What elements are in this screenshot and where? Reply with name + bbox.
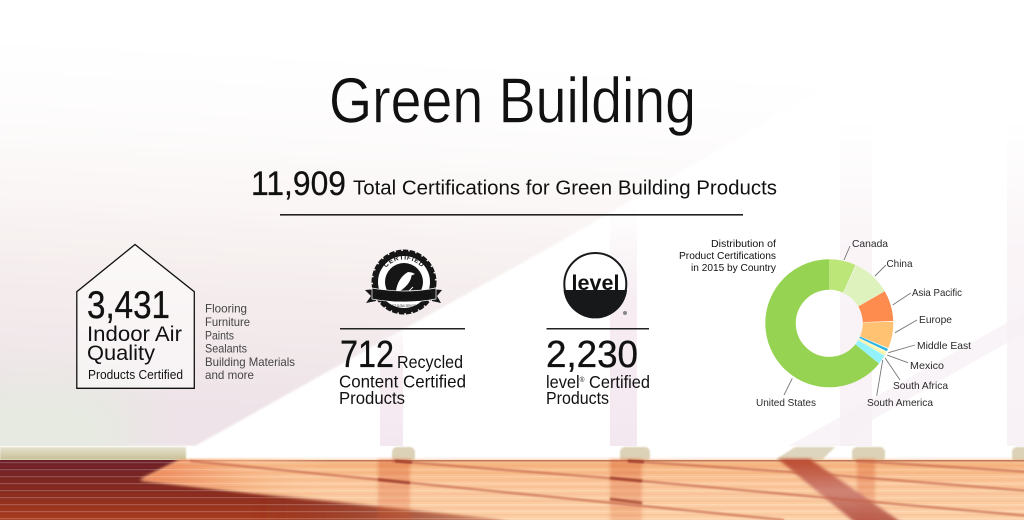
slice labels: China bbox=[886, 258, 913, 270]
stat: 2,230: 2,230 bbox=[546, 334, 638, 376]
label: recycled content certified products: Recycled bbox=[397, 352, 463, 372]
label: level certified products: Products bbox=[546, 388, 609, 408]
donut chart bbox=[761, 255, 898, 392]
subtitle: total certifications bbox=[251, 165, 777, 203]
divider bbox=[340, 328, 465, 330]
label: level certified products: Certified bbox=[585, 372, 650, 392]
chart heading bbox=[679, 238, 777, 274]
label: level certified products: ® bbox=[580, 376, 585, 384]
label: recycled content certified products: Content Certified bbox=[339, 372, 466, 392]
icon: level logo bbox=[564, 253, 627, 318]
icon: recycled content certified badge bbox=[365, 250, 442, 314]
label: level certified products bbox=[546, 372, 650, 408]
icon: level logo: level bbox=[572, 272, 620, 295]
list of product types: Flooring bbox=[205, 302, 247, 316]
slice labels bbox=[756, 238, 971, 409]
slice labels: South America bbox=[867, 397, 933, 409]
label: indoor air quality: Indoor Air bbox=[87, 323, 182, 346]
list of product types: Paints bbox=[205, 328, 234, 342]
leader lines bbox=[784, 246, 917, 396]
background scene: sunlit wall and wood floor bbox=[0, 168, 1024, 520]
icon: recycled content certified badge: SCS GLOBAL SERVICES bbox=[392, 304, 416, 308]
slice labels: Mexico bbox=[910, 360, 944, 372]
chart heading: in 2015 by Country bbox=[691, 262, 777, 274]
stat: 3,431: 3,431 bbox=[87, 284, 170, 327]
slice labels: Middle East bbox=[917, 340, 971, 352]
icon: recycled content certified badge: RECYCLED CONTENT bbox=[376, 292, 432, 300]
divider bbox=[546, 328, 649, 330]
chart heading: Distribution of bbox=[711, 238, 776, 250]
label: indoor air quality bbox=[87, 323, 182, 365]
list of product types: Furniture bbox=[205, 315, 250, 329]
slice labels: Canada bbox=[852, 238, 888, 250]
subtitle: total certifications: Total Certifications for Green Building Products bbox=[353, 176, 777, 200]
panel: recycled content bbox=[339, 250, 466, 408]
icon: recycled content certified badge: CERTIFIED bbox=[384, 256, 424, 267]
label: recycled content certified products bbox=[339, 352, 466, 408]
list of product types: Sealants bbox=[205, 342, 247, 356]
icon: house outline bbox=[77, 244, 194, 388]
panel: distribution donut chart bbox=[679, 238, 971, 409]
list of product types bbox=[205, 302, 295, 382]
stat: 712: 712 bbox=[340, 334, 394, 376]
label: level certified products: level bbox=[546, 372, 582, 392]
panel: level certified bbox=[546, 253, 650, 408]
label: products certified: Products Certified bbox=[88, 367, 183, 382]
chart heading: Product Certifications bbox=[679, 250, 776, 262]
slice labels: United States bbox=[756, 397, 816, 409]
list of product types: and more bbox=[205, 368, 254, 382]
divider under subtitle bbox=[280, 214, 743, 216]
slice labels: Asia Pacific bbox=[912, 287, 962, 299]
slice labels: Europe bbox=[919, 314, 952, 326]
list of product types: Building Materials bbox=[205, 355, 295, 369]
title: Green Building bbox=[329, 64, 696, 136]
label: indoor air quality: Quality bbox=[87, 342, 156, 365]
panel: indoor air quality bbox=[77, 244, 295, 388]
slice labels: South Africa bbox=[893, 380, 948, 392]
subtitle: total certifications: 11,909 bbox=[251, 165, 346, 203]
label: recycled content certified products: Products bbox=[339, 388, 405, 408]
